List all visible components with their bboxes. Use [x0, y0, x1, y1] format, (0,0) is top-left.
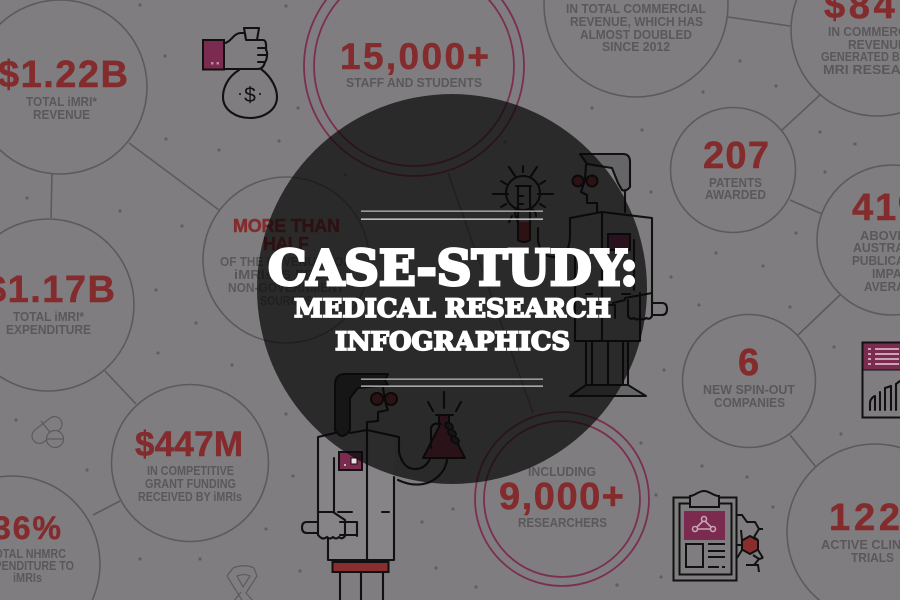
stat: active clinical trials: TRIALS [851, 550, 894, 565]
stat: total commercial revenue [544, 0, 728, 97]
stat: researchers: RESEARCHERS [518, 515, 607, 530]
title block: INFOGRAPHICS [335, 327, 570, 356]
stat: patents awarded: PATENTS [709, 175, 762, 190]
icon: hand holding money bag [203, 28, 277, 118]
stat: staff and students: 15,000+ [340, 36, 489, 77]
stat: more than half: HALF [263, 234, 309, 254]
stat: more than half: NON-GOVERNMENT [228, 280, 344, 295]
stat: patents awarded: 207 [703, 135, 769, 177]
illustration: scientist holding test tube [493, 154, 667, 396]
title block: CASE-STUDY: [268, 239, 638, 297]
stat: patents awarded: AWARDED [705, 187, 766, 202]
stat: total commercial revenue: SINCE 2012 [602, 39, 670, 54]
stat: more than half: MORE THAN [233, 216, 340, 236]
stat: commercial revenue from MRI research [791, 0, 900, 116]
stat: more than half: iMRIs IS FROM [234, 267, 338, 282]
title block: MEDICAL RESEARCH [294, 294, 611, 323]
stat: researchers [475, 412, 649, 586]
stat: more than half [203, 177, 369, 343]
stat: total commercial revenue: ALMOST DOUBLED [580, 27, 692, 42]
stat: staff and students: STAFF AND STUDENTS [346, 75, 482, 90]
stat: spin-out companies: 6 [738, 342, 759, 384]
stat: staff and students [304, 0, 524, 176]
dark title circle [257, 94, 647, 484]
icon: awareness ribbon [227, 566, 257, 600]
stat: spin-out companies: COMPANIES [714, 395, 785, 410]
stat: spin-out companies: NEW SPIN-OUT [703, 382, 795, 397]
stat: NHMRC expenditure share [0, 476, 100, 600]
stat: competitive grant funding: IN COMPETITIVE [147, 463, 234, 478]
stat: more than half: OF THE REVENUE FOR [220, 254, 353, 269]
stat: competitive grant funding: RECEIVED BY iMRIs [138, 489, 242, 504]
stat: total iMRI revenue: TOTAL iMRI* [26, 94, 98, 109]
stat: total iMRI expenditure: EXPENDITURE [6, 322, 91, 337]
stat: patents awarded [670, 108, 796, 232]
stat: total iMRI revenue [0, 0, 147, 174]
icon: clipboard with molecule [674, 491, 763, 580]
icon: document with bar chart [862, 342, 900, 418]
stat: total iMRI expenditure: TOTAL iMRI* [13, 309, 85, 324]
stat: above Australian publication impact average [817, 165, 900, 315]
stat: more than half: SOURCES [260, 293, 312, 308]
title block [268, 210, 638, 387]
stat: competitive grant funding: GRANT FUNDING [145, 476, 236, 491]
stat: NHMRC expenditure share: iMRIs [13, 570, 42, 585]
stat: total commercial revenue: REVENUE, WHICH HAS [570, 14, 703, 29]
stat: active clinical trials [787, 444, 900, 600]
stat: competitive grant funding [112, 384, 268, 542]
stat: spin-out companies [682, 314, 816, 448]
stat: researchers: 9,000+ [499, 476, 624, 518]
stat: total iMRI revenue: $1.22B [0, 54, 128, 96]
stat: total commercial revenue: IN TOTAL COMMERCIAL [566, 1, 706, 16]
stat: total iMRI revenue: REVENUE [33, 107, 90, 122]
stat: total iMRI expenditure [0, 219, 134, 391]
icon: pills [29, 414, 65, 448]
illustration: scientist holding flask [302, 374, 465, 600]
stat: researchers: INCLUDING [528, 464, 596, 479]
stat: competitive grant funding: $447M [135, 425, 243, 464]
icon: hand holding money bag: $ [244, 84, 256, 107]
